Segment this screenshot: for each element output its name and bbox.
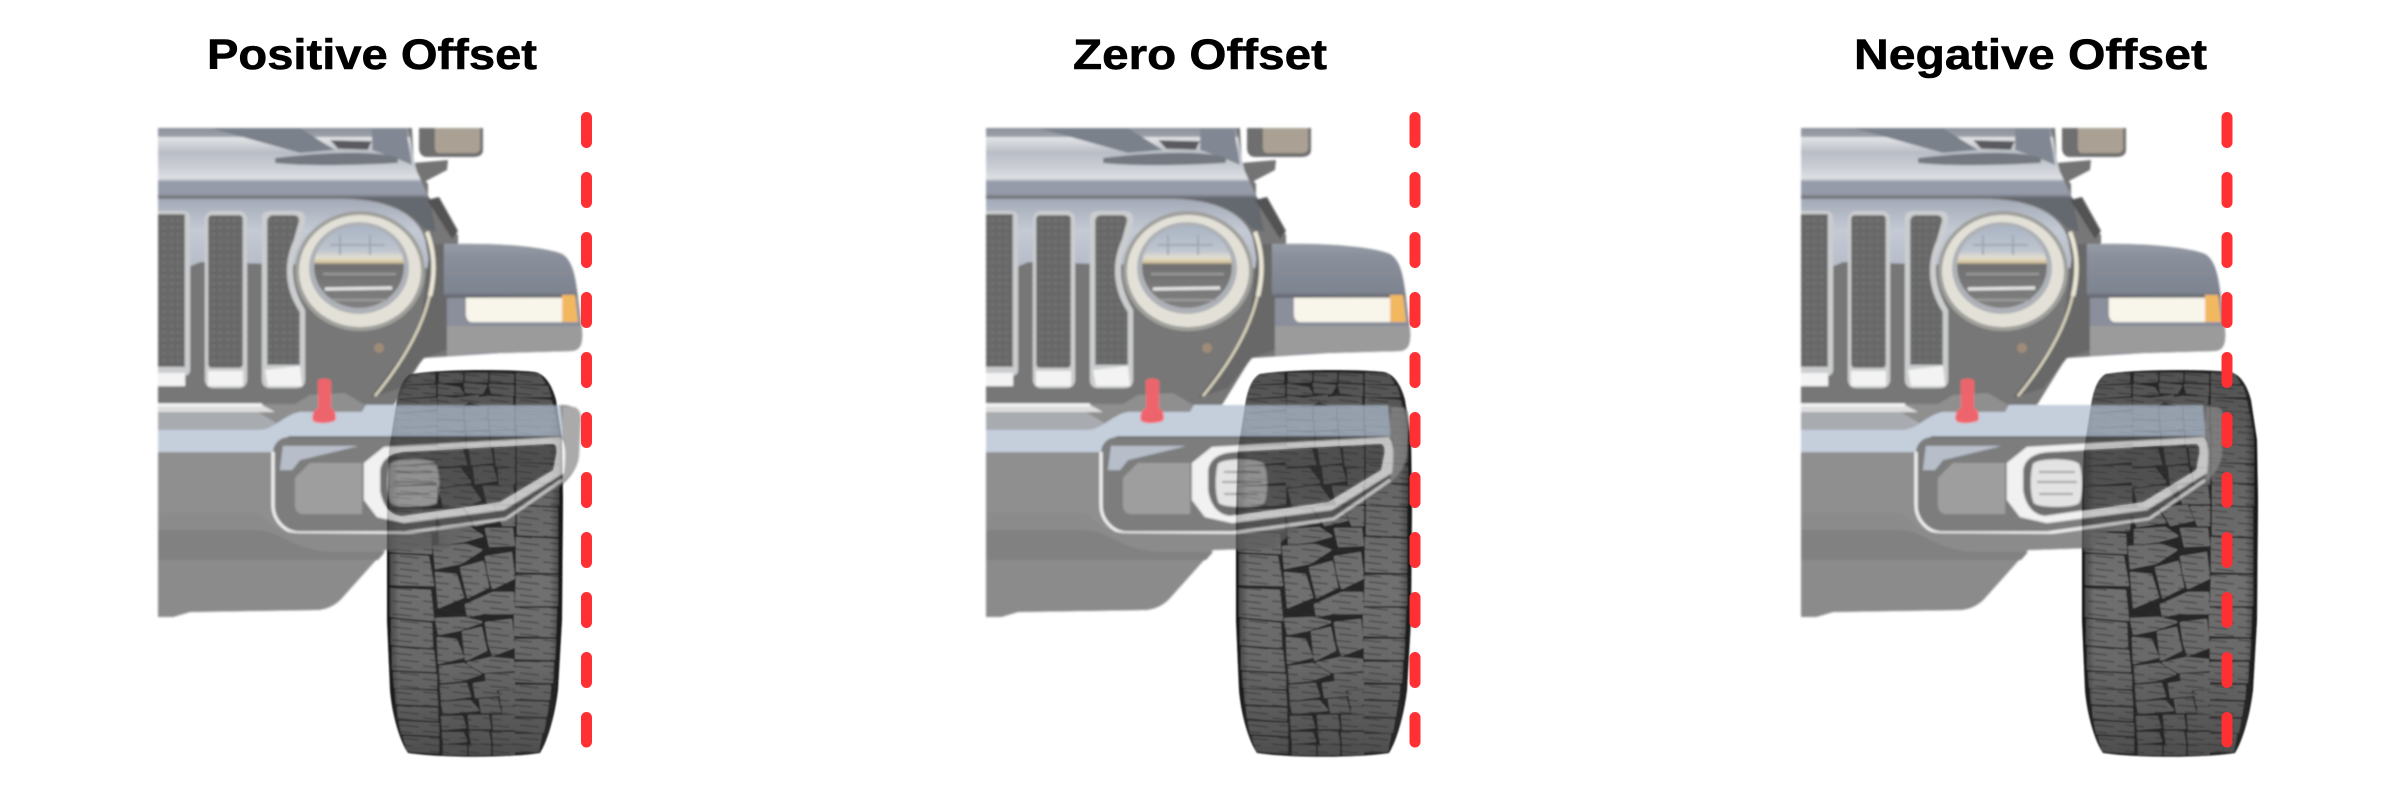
tire: negative offset xyxy=(2080,370,2260,760)
tire: zero offset xyxy=(1234,370,1414,760)
dashed reference line: positive offset xyxy=(581,118,592,742)
jeep front: positive offset xyxy=(158,128,582,617)
panel: negative offset xyxy=(1801,31,2260,760)
tire showing through fog lamp recess xyxy=(386,444,556,516)
dashed reference line: zero offset xyxy=(1410,118,1420,742)
tire: positive offset xyxy=(385,370,565,760)
heading: positive offset: Positive Offset xyxy=(207,31,537,79)
jeep front: zero offset xyxy=(986,128,1410,617)
jeep front: negative offset xyxy=(1801,128,2225,617)
heading: negative offset: Negative Offset xyxy=(1854,31,2207,79)
tire showing through fog lamp recess xyxy=(1235,444,1384,516)
dashed reference line: negative offset xyxy=(2222,118,2232,742)
heading: zero offset: Zero Offset xyxy=(1073,31,1327,79)
panel: zero offset xyxy=(986,31,1415,760)
panel: positive offset xyxy=(158,31,586,760)
tire showing through fog lamp recess xyxy=(2082,444,2200,511)
